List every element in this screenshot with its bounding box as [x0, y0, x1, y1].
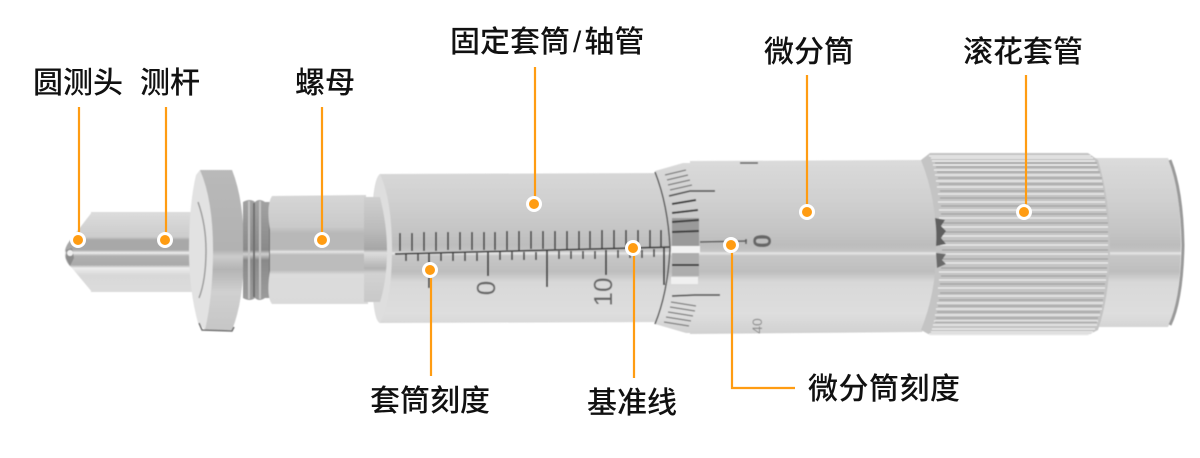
callout: 测杆	[140, 67, 200, 246]
callout: 套筒刻度	[370, 264, 490, 418]
callout: 基准线: 基准线	[587, 387, 677, 420]
callout: 测杆: 测杆	[140, 67, 200, 100]
callout: 圆测头	[33, 67, 123, 246]
callout: 微分筒: 微分筒	[764, 36, 854, 69]
knurled sleeve	[921, 153, 1110, 335]
sleeve scale	[395, 230, 672, 288]
callout: 套筒刻度: 套筒刻度	[370, 385, 490, 418]
callout: 微分筒	[764, 36, 854, 218]
round probe tip	[65, 212, 92, 292]
numeral 10: 10	[588, 278, 618, 306]
micrometer head illustration	[65, 153, 1183, 335]
callout: 滚花套管	[963, 36, 1083, 218]
thimble bevel scale	[655, 163, 720, 333]
measuring rod	[91, 212, 199, 292]
callout: 微分筒刻度	[724, 238, 960, 406]
nut neck	[364, 197, 387, 302]
thread	[243, 200, 280, 300]
small numeral on thimble edge: 40	[749, 318, 765, 334]
numeral 0 on thimble: 0	[749, 234, 777, 248]
callout: 微分筒刻度: 微分筒刻度	[808, 373, 960, 406]
callout: 滚花套管: 滚花套管	[963, 36, 1083, 69]
callout: 螺母	[295, 67, 355, 246]
callout: 圆测头: 圆测头	[33, 67, 123, 100]
callout: 螺母: 螺母	[295, 67, 355, 100]
thimble marks and numerals	[700, 163, 777, 334]
callout: 固定套筒/轴管	[450, 26, 644, 210]
nut	[268, 195, 368, 304]
numeral 0: 0	[471, 281, 501, 295]
end cap	[1085, 158, 1183, 327]
thimble	[690, 160, 945, 334]
fixed sleeve	[372, 173, 672, 323]
callout: 基准线	[587, 242, 677, 420]
flange ring	[189, 170, 244, 331]
callout: 固定套筒/轴管: 固定套筒/轴管	[450, 26, 644, 59]
sleeve numerals	[471, 278, 618, 306]
